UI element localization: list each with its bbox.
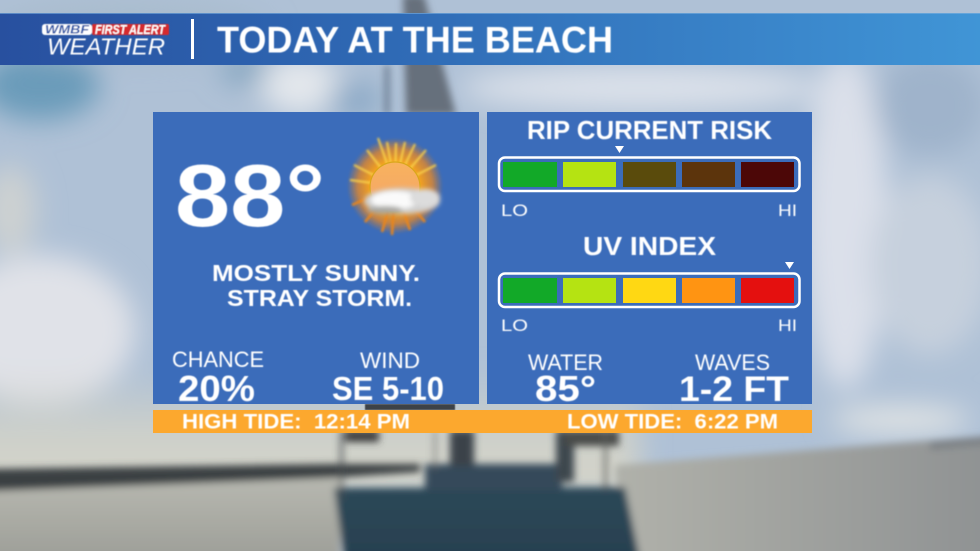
conditions text: STRAY STORM. (227, 285, 412, 311)
header divider (191, 19, 194, 59)
uv index heading: UV INDEX (583, 231, 717, 261)
logo: WMBF First Alert Weather: WMBF (45, 22, 90, 36)
rip current heading: RIP CURRENT RISK (527, 115, 772, 145)
rip current lo/hi labels: LO (501, 201, 528, 220)
waves: WAVES (695, 350, 770, 375)
chance of rain: 20% (178, 368, 255, 409)
sail and mast (403, 0, 456, 115)
rip current scale (499, 158, 800, 191)
conditions text: MOSTLY SUNNY. (212, 260, 420, 286)
tide bar (153, 410, 812, 434)
water temperature: WATER (528, 350, 603, 375)
water temperature (528, 350, 603, 409)
waves: 1-2 FT (679, 370, 789, 409)
uv lo/hi labels (501, 316, 797, 335)
wind: SE 5-10 (332, 370, 444, 407)
temperature: 88° (175, 146, 325, 245)
conditions text (212, 260, 420, 311)
logo: WMBF First Alert Weather: WEATHER (47, 34, 165, 60)
water temperature: 85° (535, 368, 596, 409)
uv lo/hi labels: HI (778, 316, 797, 335)
chance of rain (172, 347, 264, 409)
rip current lo/hi labels: HI (778, 201, 797, 220)
logo: WMBF First Alert Weather (42, 22, 169, 60)
panel: beach conditions (487, 112, 812, 409)
wind: WIND (360, 348, 420, 373)
uv index scale (499, 274, 800, 307)
panel: forecast (153, 112, 479, 409)
uv lo/hi labels: LO (501, 316, 528, 335)
title: TODAY AT THE BEACH (217, 20, 613, 60)
uv marker (785, 262, 794, 269)
wind (332, 348, 444, 407)
high tide: HIGH TIDE: 12:14 PM (182, 410, 410, 434)
waves (679, 350, 789, 409)
rip current marker (615, 146, 624, 153)
header bar (0, 13, 980, 65)
lower sky haze (0, 370, 640, 495)
icon: sun behind cloud (347, 138, 443, 235)
logo: WMBF First Alert Weather: FIRST ALERT (95, 22, 166, 37)
chance of rain: CHANCE (172, 347, 264, 372)
rip current lo/hi labels (501, 201, 797, 220)
dark band showing beneath panels (365, 404, 455, 410)
low tide: LOW TIDE: 6:22 PM (567, 410, 778, 434)
